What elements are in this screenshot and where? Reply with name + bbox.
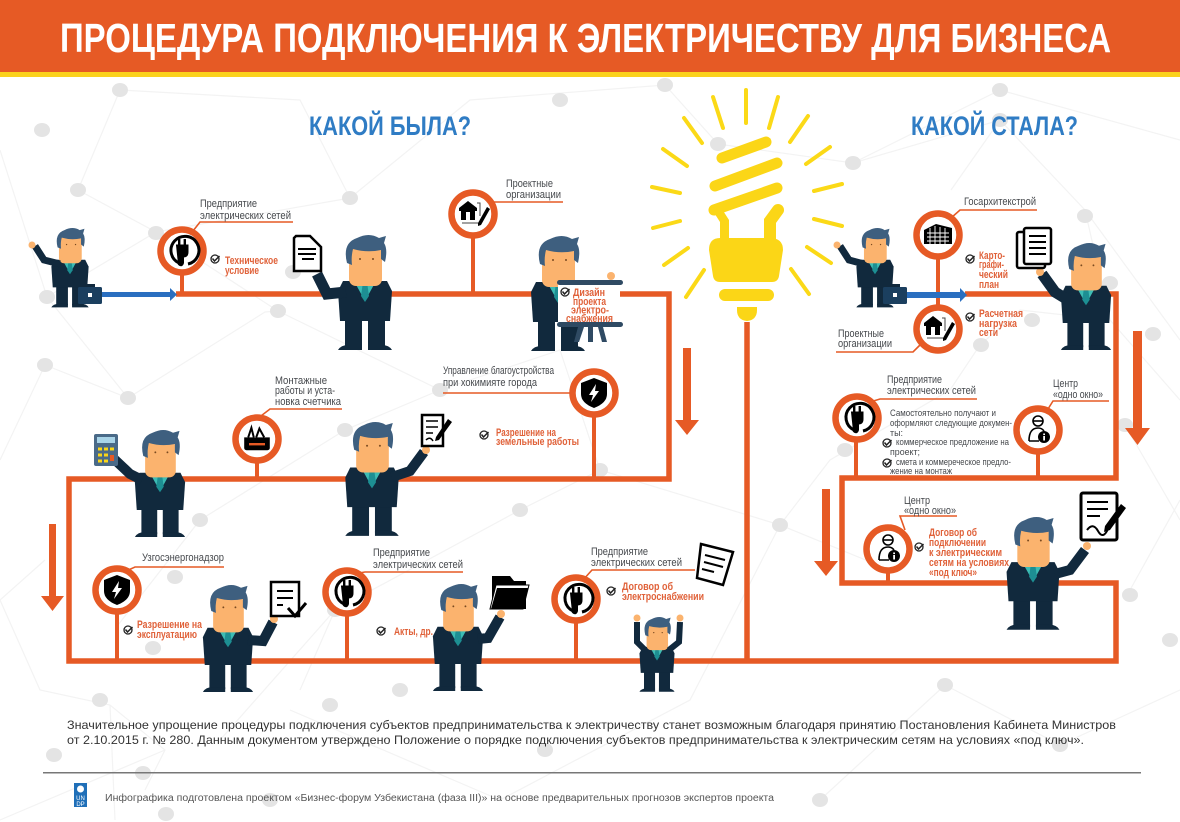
results: before: земельные работы (496, 436, 579, 448)
person 1: applicant before (28, 228, 102, 307)
blue arrow: start before (100, 288, 177, 301)
labels: after: Центр (904, 495, 930, 507)
person 3 with board: проекта (573, 296, 607, 308)
results: after: нагрузка (979, 318, 1018, 330)
text block: documents obtained: жение на монтаж (890, 466, 952, 476)
results: after: графи- (979, 259, 1004, 271)
UNDP logo: DP (76, 802, 85, 808)
results: before: условие (225, 265, 259, 277)
results: before: эксплуатацию (137, 629, 197, 641)
footer credit: Инфографика подготовлена проектом «Бизнес-форум Узбекистана (фаза III)» на основе предварительных прогнозов экспертов проекта (105, 792, 774, 804)
heading: after: КАКОЙ СТАЛА? (911, 110, 1078, 141)
circle icon: power grid company 1 (160, 230, 204, 272)
UNDP logo: UN (76, 796, 85, 802)
text block: documents obtained: смета и коммереческое предло- (896, 457, 1011, 467)
person 3 with board: Дизайн (573, 287, 605, 299)
labels: before: при хокимияте города (443, 377, 538, 389)
labels: before (142, 178, 682, 571)
text block: documents obtained: коммерческое предложение на (896, 437, 1009, 447)
results: after: сетям на условиях (929, 557, 1010, 569)
results: after: план (979, 279, 999, 291)
labels: after: Проектные (838, 328, 884, 340)
circle icon: power grid company 3 (554, 578, 598, 620)
results: after: сети (979, 327, 998, 339)
results: before: Акты, др. (394, 626, 433, 638)
labels: before: Проектные (506, 178, 553, 190)
circle icon: installation (236, 418, 278, 460)
process lines (69, 238, 1116, 661)
circle icon: power grid company 2 (326, 570, 368, 614)
labels: before: Узгосэнергонадзор (142, 552, 224, 564)
description paragraph: от 2.10.2015 г. № 280. Данным документом утверждено Положение о порядке подключения субъектов предпринимательства к электрическим сетям на условиях «под ключ». (67, 733, 1084, 747)
text block: documents obtained: ты: (890, 428, 903, 438)
results: after: Карто- (979, 250, 1005, 262)
person 6 with checklist (203, 582, 306, 692)
person 4 with calculator (94, 430, 185, 537)
circle icon: energy supervision (96, 568, 138, 612)
text block: documents obtained: проект; (890, 447, 920, 457)
blue arrow: start after (905, 288, 967, 302)
label rules (124, 196, 1109, 580)
labels: before: новка счетчика (275, 396, 342, 408)
person 11 with contract (1007, 493, 1126, 630)
results: after: Расчетная (979, 308, 1023, 320)
text block: documents obtained: оформляют следующие докумен- (890, 418, 1012, 428)
labels: before: электрических сетей (591, 557, 682, 569)
results: before: Разрешение на (496, 427, 557, 439)
title banner (0, 0, 1180, 77)
circle icon: design organisations 1 (452, 192, 494, 236)
results: after: Договор об (929, 527, 977, 539)
labels: after (838, 196, 1103, 517)
results: before: Разрешение на (137, 619, 203, 631)
results: before (124, 255, 704, 641)
light bulb (652, 90, 842, 321)
results: after: к электрическим (929, 547, 1002, 559)
person 3 with board: электро- (571, 304, 609, 316)
labels: after: Предприятие (887, 374, 942, 386)
person 7 with folder (433, 576, 529, 691)
description paragraph (67, 718, 1116, 747)
labels: after: Центр (1053, 378, 1078, 390)
results: after: ческий (979, 269, 1008, 281)
text block: documents obtained: Самостоятельно получают и (890, 408, 996, 418)
results: before: Техническое (225, 255, 278, 267)
person 3 with board (531, 236, 623, 351)
results: before: электроснабжении (622, 591, 704, 603)
person 5 with signed paper (345, 415, 452, 536)
labels: before: работы и уста- (275, 385, 335, 397)
labels: after: «одно окно» (904, 505, 956, 517)
results: before: Договор об (622, 581, 673, 593)
person 3 with board: снабжения (566, 313, 613, 325)
labels: after: организации (838, 338, 892, 350)
circle icon: improvement department (572, 372, 616, 414)
down arrows (41, 331, 1150, 611)
labels: before: Предприятие (373, 547, 430, 559)
person 8 celebrating (634, 544, 733, 692)
person 2 with document (294, 235, 392, 350)
results: after: «под ключ» (929, 567, 977, 579)
results: after (915, 250, 1023, 579)
labels: before: Предприятие (591, 546, 648, 558)
person 9: applicant after (834, 228, 907, 307)
labels: after: «одно окно» (1053, 389, 1103, 401)
person 10 with documents (1017, 228, 1111, 350)
labels: before: электрических сетей (373, 559, 463, 571)
labels: before: Предприятие (200, 198, 257, 210)
labels: before: Монтажные (275, 375, 327, 387)
results: after: подключении (929, 537, 986, 549)
labels: after: электрических сетей (887, 385, 976, 397)
labels: before: электрических сетей (200, 210, 291, 222)
labels: after: Госархитекстрой (964, 196, 1036, 208)
text block: documents obtained (883, 408, 1012, 476)
circle icon: state architecture (916, 214, 960, 256)
description paragraph: Значительное упрощение процедуры подключения субъектов предпринимательства к электричеству станет возможным благодаря принятию Постановления Кабинета Министров (67, 718, 1116, 732)
circle icon: power grid company 4 (836, 396, 878, 440)
labels: before: организации (506, 189, 561, 201)
circle icon: design organisations 2 (916, 308, 960, 350)
UNDP logo (74, 783, 87, 808)
heading: before: КАКОЙ БЫЛА? (309, 110, 471, 141)
circle icon: one stop centre 1 (1016, 408, 1060, 452)
labels: before: Управление благоустройства (443, 365, 555, 377)
circle icon: one stop centre 2 (866, 528, 910, 570)
